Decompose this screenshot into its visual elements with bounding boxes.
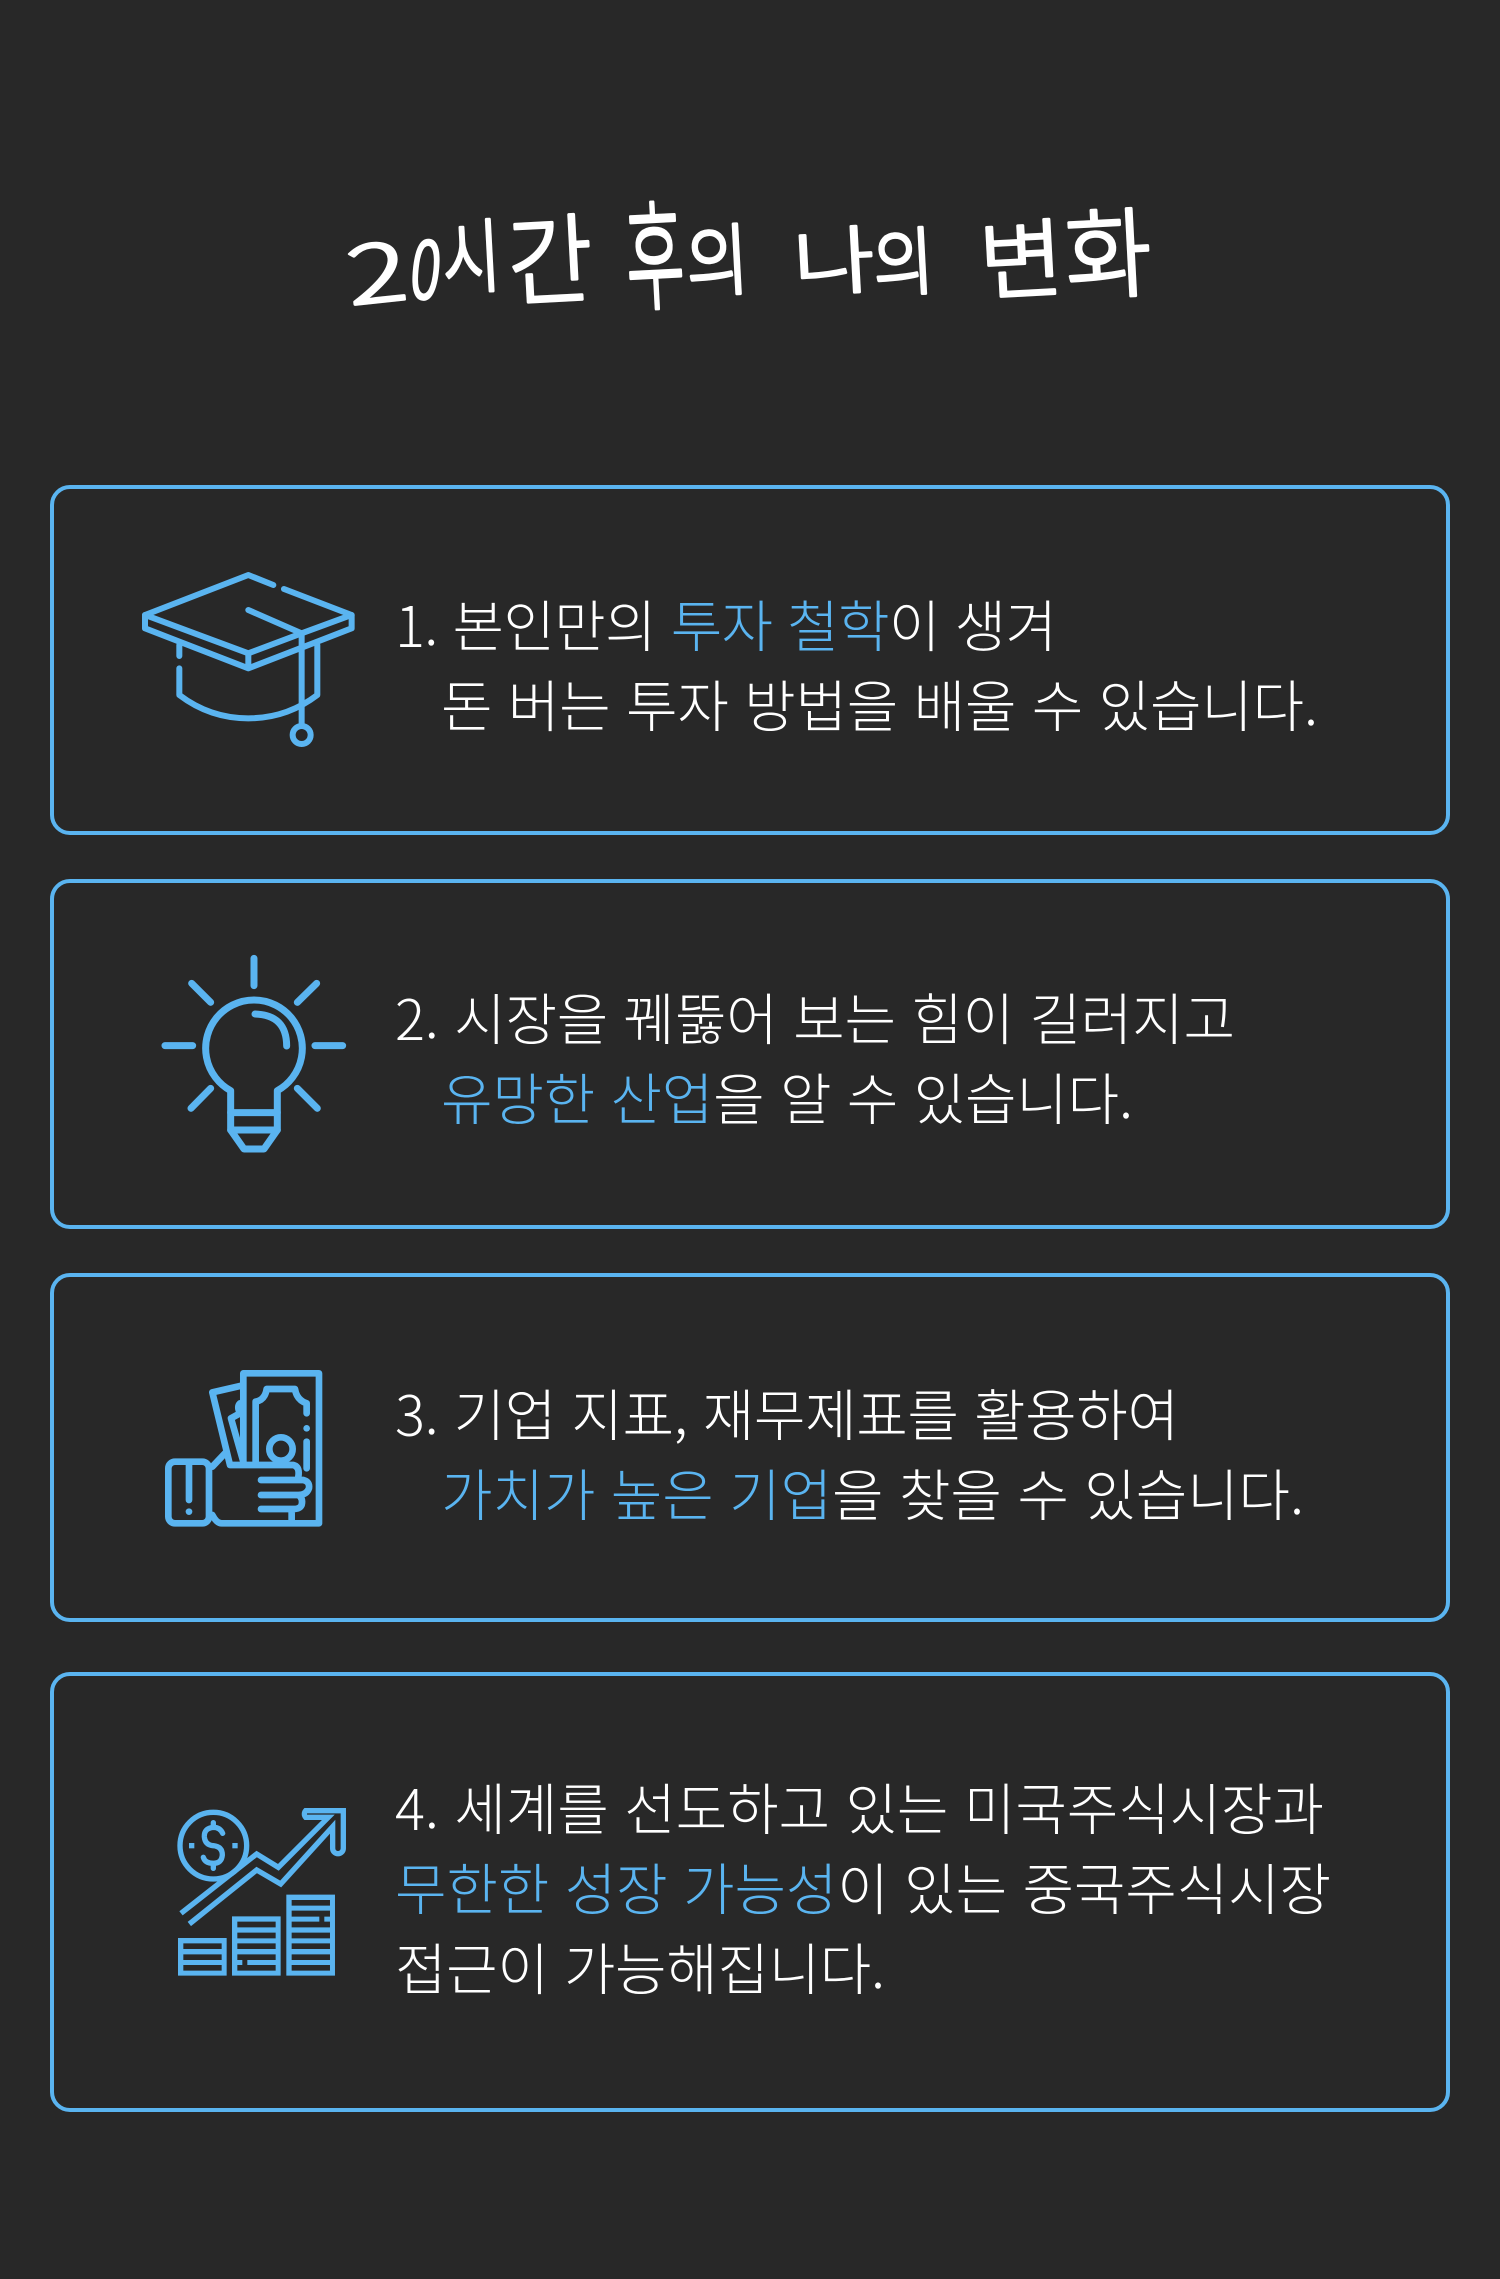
title: 의	[683, 198, 751, 314]
panel: card 2	[52, 881, 1448, 1227]
text: item 3: 가치가 높은 기업을 찾을 수 있습니다.	[441, 1452, 1304, 1533]
text: item 1: 돈 버는 투자 방법을 배울 수 있습니다.	[441, 663, 1318, 744]
title: 0	[406, 208, 447, 323]
text: item 3	[395, 1372, 1304, 1533]
icon: graduation cap	[145, 575, 352, 744]
title: 시	[439, 191, 503, 311]
icon: growth chart with dollar coin	[178, 1811, 343, 1976]
text: item 1: 1. 본인만의 투자 철학이 생겨	[395, 583, 1057, 664]
panel: card 4	[52, 1674, 1448, 2110]
text: item 3: 3. 기업 지표, 재무제표를 활용하여	[395, 1372, 1179, 1453]
text: item 4	[395, 1766, 1331, 2007]
text: item 4: 무한한 성장 가능성이 있는 중국주식시장	[395, 1846, 1331, 1927]
title: 후	[621, 163, 688, 336]
title: 나	[790, 201, 877, 312]
panel: card 3	[52, 1275, 1448, 1620]
title: 화	[1061, 175, 1155, 321]
title: 2	[341, 207, 412, 329]
text: item 2	[395, 976, 1235, 1137]
text: item 2: 유망한 산업을 알 수 있습니다.	[441, 1056, 1133, 1137]
text: item 4: 접근이 가능해집니다.	[395, 1926, 885, 2007]
title: 변	[976, 189, 1067, 318]
text: item 1	[395, 583, 1318, 744]
icon: light bulb	[165, 958, 343, 1149]
title	[341, 163, 1155, 336]
text: item 4: 4. 세계를 선도하고 있는 미국주식시장과	[395, 1766, 1324, 1847]
panel: card 1	[52, 487, 1448, 833]
title: 의	[870, 203, 936, 313]
title: 간	[504, 182, 596, 327]
icon: hand holding money	[168, 1373, 319, 1523]
text: item 2: 2. 시장을 꿰뚫어 보는 힘이 길러지고	[395, 976, 1235, 1057]
